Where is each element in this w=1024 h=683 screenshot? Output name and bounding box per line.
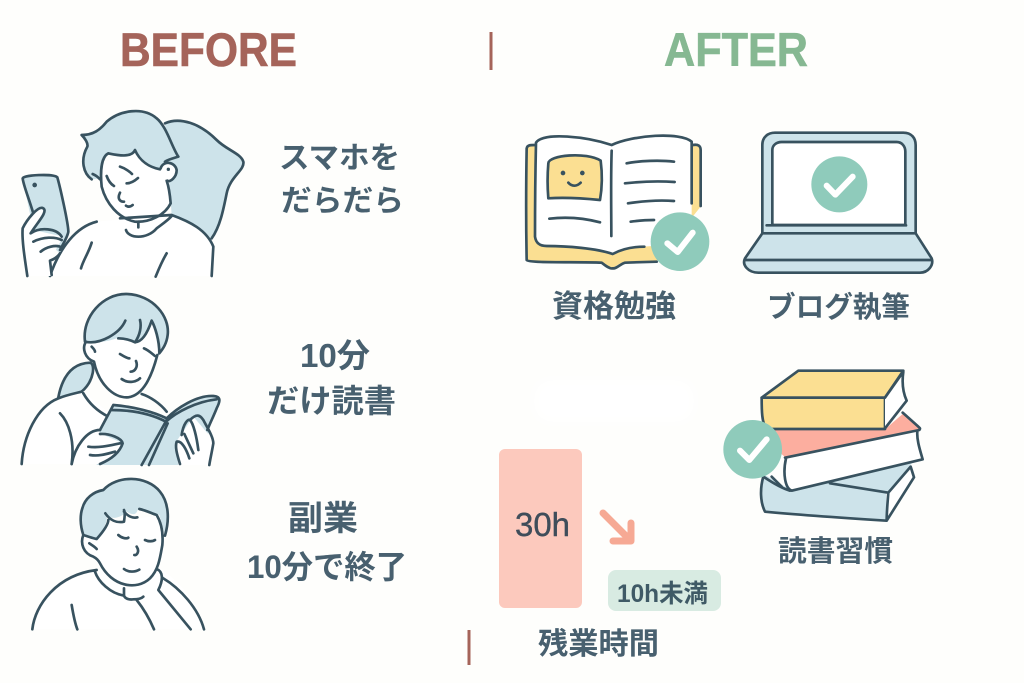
heading: AFTER: AFTER [664, 23, 808, 76]
text: スマホをだらだら [279, 142, 404, 218]
text: 副業10分で終了: 副業 [288, 500, 358, 538]
text: 残業時間: 残業時間 [538, 628, 659, 661]
chart: overtime hours reduction [499, 449, 721, 611]
text: スマホをだらだら: だらだら [281, 185, 404, 218]
heading: BEFORE: BEFORE [120, 23, 297, 76]
icon: open book with check [526, 136, 709, 271]
icon: stack of books with check [723, 371, 923, 521]
label: 30h: 30h [515, 506, 570, 543]
arrow: decrease [603, 513, 631, 541]
illustration: person lying with smartphone [22, 111, 243, 277]
illustration: person reading a book [22, 294, 219, 465]
bar: 30h [499, 449, 582, 608]
text: 10分だけ読書: だけ読書 [267, 383, 396, 419]
divider: bottom [468, 630, 470, 665]
text: 10分だけ読書 [267, 337, 396, 419]
icon: laptop with check [744, 133, 932, 273]
text: 資格勉強: 資格勉強 [552, 289, 676, 324]
divider: top [490, 32, 492, 70]
text: 10分だけ読書: 10分 [300, 337, 370, 374]
text: 副業10分で終了 [247, 500, 407, 585]
label: 10h未満: 10h未満 [617, 580, 708, 608]
text: ブログ執筆: ブログ執筆 [767, 290, 910, 324]
text: 読書習慣: 読書習慣 [778, 535, 893, 568]
illustration: person with eyes closed [32, 479, 204, 629]
text: スマホをだらだら: スマホを [279, 142, 400, 175]
faded white patch [534, 380, 694, 422]
text: 副業10分で終了: 10分で終了 [247, 549, 407, 585]
box: under 10h [608, 570, 721, 611]
